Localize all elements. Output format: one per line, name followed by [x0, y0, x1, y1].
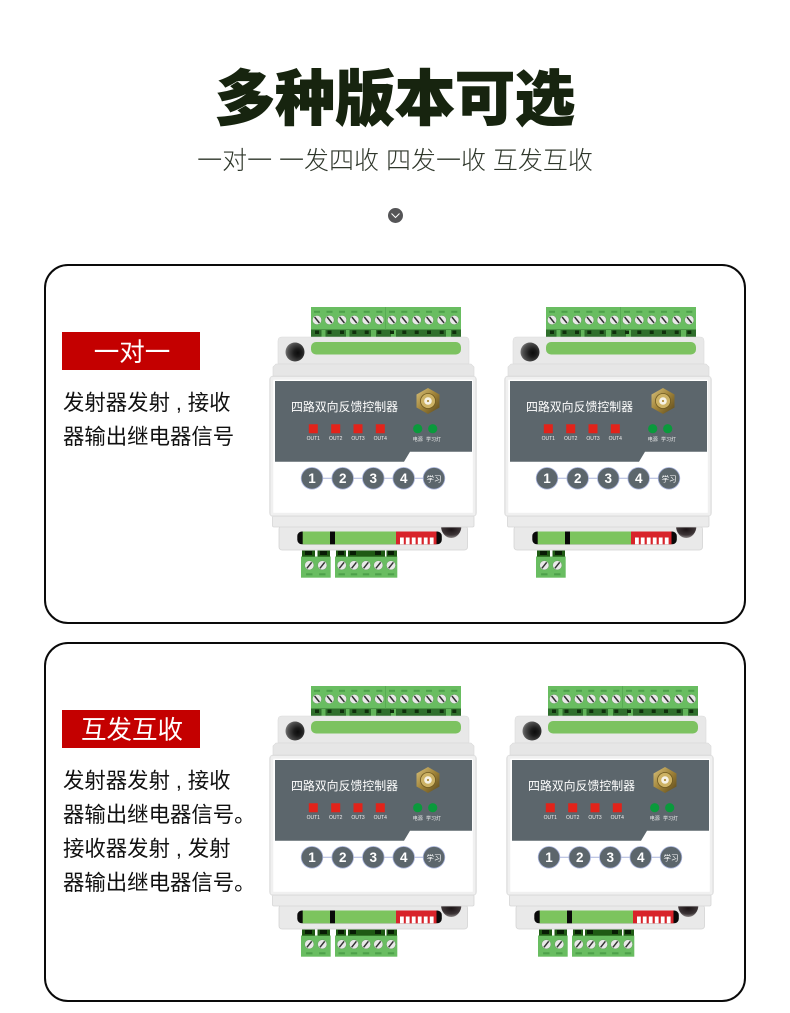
description text: 器输出继电器信号 [63, 425, 234, 449]
output indicators: OUT1 [307, 815, 320, 821]
output indicators: OUT3 [351, 436, 365, 442]
description text: 发射器发射 , 接收 [63, 391, 231, 415]
panel frame [45, 265, 745, 623]
bottom terminals [301, 930, 397, 957]
device name: 四路双向反馈控制器 [291, 400, 398, 414]
status indicators: 学习灯 [663, 815, 678, 822]
panel: one-to-one [45, 265, 745, 623]
buttons: 1 [545, 850, 553, 865]
panel frame [45, 643, 745, 1001]
output indicators: OUT3 [586, 436, 600, 442]
status indicators [650, 803, 678, 822]
status indicators [413, 803, 441, 822]
device: controller left [270, 307, 476, 578]
output indicators: OUT4 [374, 815, 387, 821]
bottom terminals [301, 550, 397, 578]
description text: 器输出继电器信号。 [63, 803, 256, 827]
output indicators: OUT4 [609, 436, 622, 442]
buttons: 4 [635, 471, 643, 486]
buttons: 1 [543, 471, 551, 486]
buttons: 4 [400, 471, 408, 486]
description text: 接收器发射 , 发射 [63, 837, 231, 861]
output indicators: OUT1 [544, 815, 557, 821]
buttons: 4 [637, 850, 645, 865]
device: controller right [507, 686, 713, 957]
output indicators: OUT1 [542, 436, 555, 442]
output indicators: OUT2 [566, 815, 580, 821]
version label [62, 710, 200, 748]
title: 多种版本可选 [215, 66, 575, 133]
status indicators: 电源 [648, 436, 658, 443]
buttons: 学习 [426, 473, 442, 483]
buttons: 2 [339, 850, 346, 865]
output indicators: OUT2 [564, 436, 578, 442]
buttons: 学习 [662, 473, 676, 483]
status indicators [648, 424, 676, 443]
device: controller right [505, 307, 711, 578]
buttons: 2 [576, 850, 583, 865]
buttons: 2 [574, 471, 581, 486]
status indicators: 学习灯 [426, 436, 441, 443]
output indicators: OUT3 [351, 815, 365, 821]
version label: 一对一 [94, 339, 170, 367]
icon: chevron down [388, 208, 403, 223]
output indicators [307, 803, 387, 821]
buttons: 学习 [664, 852, 678, 862]
buttons: 3 [605, 471, 613, 486]
status indicators [413, 424, 441, 443]
version label: 互发互收 [81, 716, 183, 744]
buttons: 1 [308, 471, 316, 486]
buttons: 3 [607, 850, 615, 865]
device name: 四路双向反馈控制器 [528, 779, 635, 793]
buttons [538, 846, 682, 868]
buttons: 1 [308, 850, 316, 865]
buttons [301, 468, 445, 489]
output indicators: OUT4 [374, 436, 387, 442]
description text [63, 769, 256, 895]
description text [63, 391, 234, 449]
panel: mutual send and receive [45, 643, 745, 1001]
output indicators: OUT2 [329, 436, 343, 442]
buttons: 3 [370, 471, 378, 486]
output indicators: OUT2 [329, 815, 343, 821]
device name: 四路双向反馈控制器 [291, 779, 398, 793]
buttons: 4 [400, 850, 408, 865]
output indicators: OUT1 [307, 436, 320, 442]
status indicators: 电源 [413, 815, 423, 822]
description text: 发射器发射 , 接收 [63, 769, 231, 793]
output indicators: OUT3 [588, 815, 602, 821]
output indicators [542, 424, 622, 442]
version label [62, 332, 200, 370]
buttons [536, 468, 680, 489]
buttons [301, 846, 445, 868]
status indicators: 学习灯 [661, 436, 676, 443]
description text: 器输出继电器信号。 [63, 871, 256, 895]
device: controller left [270, 686, 476, 957]
status indicators: 电源 [650, 815, 660, 822]
device name: 四路双向反馈控制器 [526, 400, 633, 414]
buttons: 3 [370, 850, 378, 865]
buttons: 2 [339, 471, 346, 486]
subtitle: 一对一 一发四收 四发一收 互发互收 [197, 147, 593, 175]
bottom terminal [536, 550, 566, 578]
output indicators [307, 424, 387, 442]
buttons: 学习 [426, 852, 442, 862]
status indicators: 电源 [413, 436, 423, 443]
status indicators: 学习灯 [426, 815, 441, 822]
output indicators: OUT4 [611, 815, 624, 821]
output indicators [544, 803, 624, 821]
bottom terminals [538, 930, 634, 957]
